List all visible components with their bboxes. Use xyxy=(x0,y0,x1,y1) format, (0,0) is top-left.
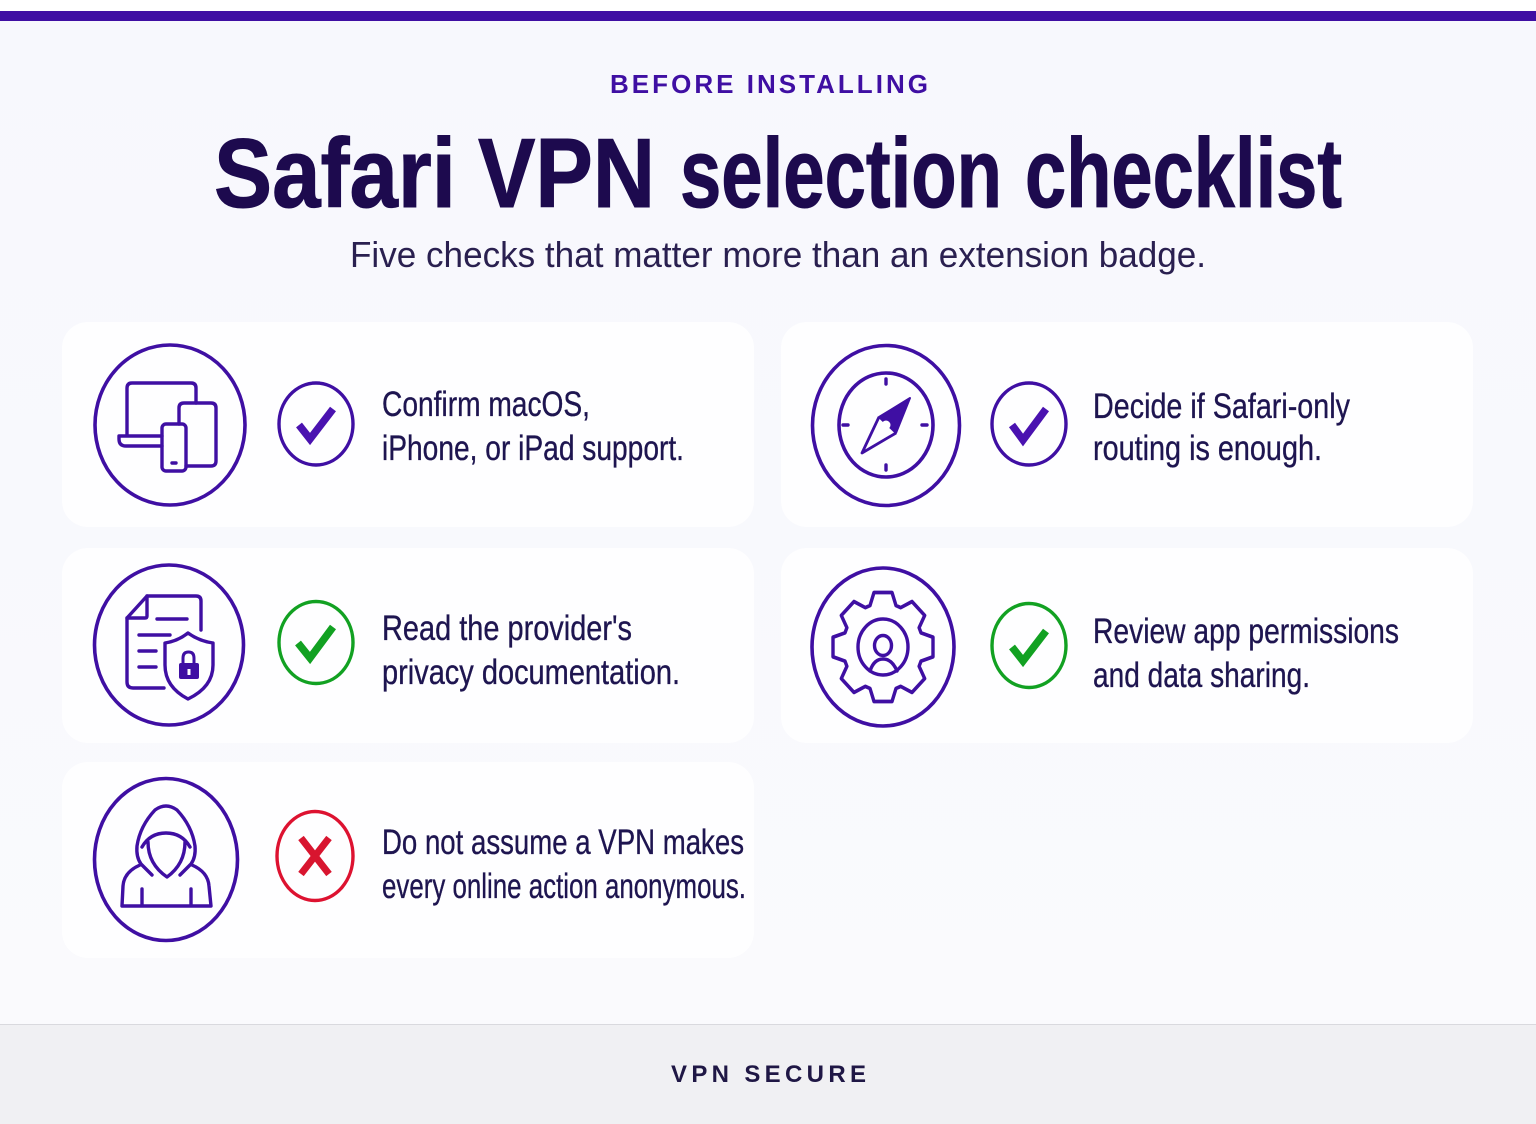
eyebrow heading: BEFORE INSTALLING xyxy=(610,69,928,99)
text: confirm support: iPhone, or iPad support. xyxy=(382,429,684,468)
title: checklist xyxy=(1025,118,1342,228)
text: Safari-only routing xyxy=(1093,387,1350,468)
text: anonymity warning xyxy=(382,823,746,906)
text: privacy documentation xyxy=(382,609,680,692)
text: Safari-only routing: Decide if Safari-only xyxy=(1093,387,1350,426)
title: Safari xyxy=(214,118,456,228)
icon: red cross xyxy=(277,812,353,900)
text: confirm support: Confirm macOS, xyxy=(382,385,590,424)
text: privacy documentation: Read the provider's xyxy=(382,609,632,648)
icon: green check xyxy=(992,604,1066,688)
panel: app permissions check xyxy=(781,548,1473,743)
icon: compass xyxy=(812,346,960,506)
icon: purple check xyxy=(992,383,1066,465)
icon: hooded figure xyxy=(94,778,238,940)
icon: purple check xyxy=(279,383,353,465)
panel: privacy documentation check xyxy=(62,548,754,743)
text: confirm support xyxy=(382,385,684,468)
text: privacy documentation: privacy documentation. xyxy=(382,653,680,692)
panel: anonymity warning xyxy=(62,762,754,958)
top accent bar xyxy=(0,11,1536,21)
text: app permissions: Review app permissions xyxy=(1093,612,1399,651)
subtitle: Five checks that matter more than an extension badge. xyxy=(350,234,1206,275)
title xyxy=(214,118,1342,228)
text: app permissions: and data sharing. xyxy=(1093,656,1310,695)
icon: document with shield lock xyxy=(94,565,244,725)
text: app permissions xyxy=(1093,612,1399,695)
footer brand: VPN SECURE xyxy=(671,1061,866,1088)
title: selection xyxy=(680,118,1002,228)
text: anonymity warning: every online action anonymous. xyxy=(382,867,746,906)
footer band xyxy=(0,1024,1536,1124)
icon: green check xyxy=(279,602,353,684)
panel: device support check xyxy=(62,322,754,527)
panel: Safari-only routing check xyxy=(781,322,1473,527)
icon: laptop, tablet and phone xyxy=(95,345,245,505)
text: Safari-only routing: routing is enough. xyxy=(1093,429,1322,468)
title: VPN xyxy=(478,118,655,228)
icon: gear with user xyxy=(812,568,954,726)
text: anonymity warning: Do not assume a VPN makes xyxy=(382,823,744,862)
